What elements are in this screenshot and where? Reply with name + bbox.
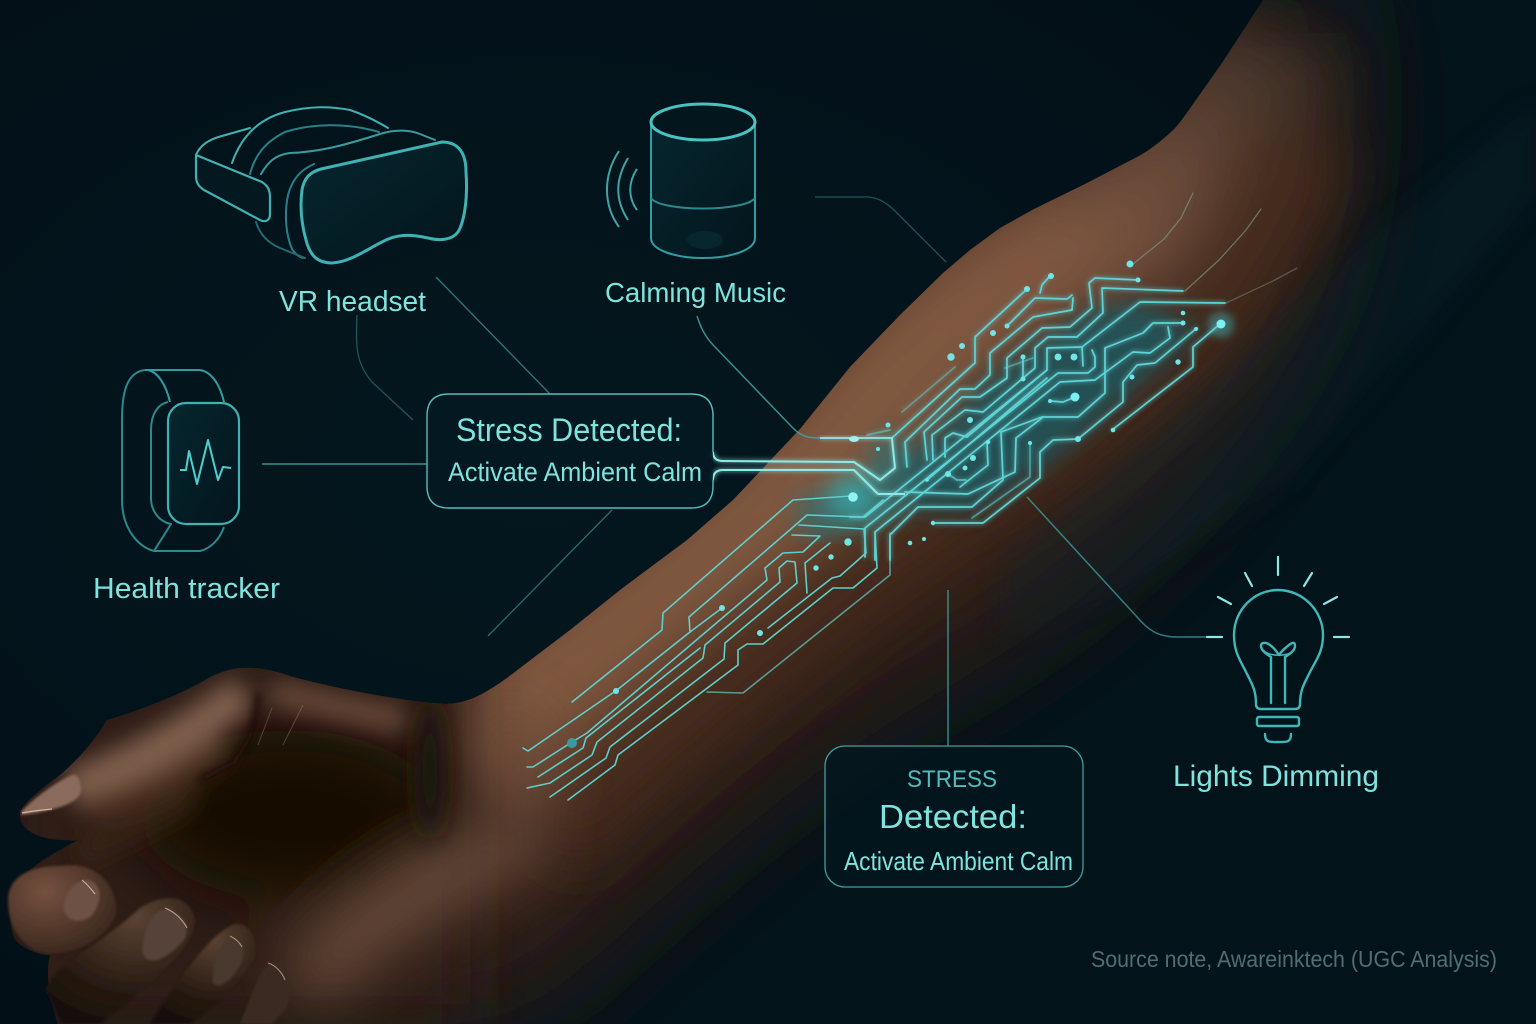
callout: stress detected top: Stress Detected: — [456, 412, 682, 448]
upper traces — [893, 289, 1027, 437]
faint outer sleeve band — [1016, 348, 1271, 584]
label: Calming Music: Calming Music — [605, 277, 786, 308]
icon: smart speaker — [607, 104, 755, 258]
callout: stress detected bottom: Activate Ambient Calm — [844, 846, 1073, 876]
icon: health tracker watch — [122, 370, 239, 551]
callout: stress detected bottom — [825, 746, 1083, 887]
circuit glow on skin — [800, 300, 1234, 520]
callout: stress detected bottom: Detected: — [879, 798, 1027, 835]
nodes — [567, 260, 1226, 748]
label: Health tracker: Health tracker — [93, 573, 280, 605]
connector lines — [262, 197, 1206, 746]
icon: VR headset — [196, 107, 467, 263]
lower traces — [523, 496, 890, 800]
icon: light bulb — [1207, 557, 1349, 742]
faded skin traces — [1133, 193, 1297, 303]
thumb nail — [21, 693, 303, 815]
circuit traces — [523, 193, 1297, 800]
callout: stress detected bottom: STRESS — [907, 766, 997, 793]
label: Lights Dimming: Lights Dimming — [1173, 760, 1379, 793]
skin shading: forearm light strip — [450, 40, 1305, 835]
source-node glow — [829, 473, 877, 521]
callout: stress detected top: Activate Ambient Calm — [448, 457, 702, 487]
fingers — [8, 865, 290, 1024]
skin shading: hand tones — [0, 640, 470, 1024]
callout connector — [713, 438, 905, 494]
skin shading: wrist shadow — [414, 700, 446, 840]
callout: stress detected top — [427, 394, 713, 508]
label: VR headset: VR headset — [279, 286, 426, 318]
source note: Source note, Awareinktech (UGC Analysis) — [1091, 946, 1497, 972]
